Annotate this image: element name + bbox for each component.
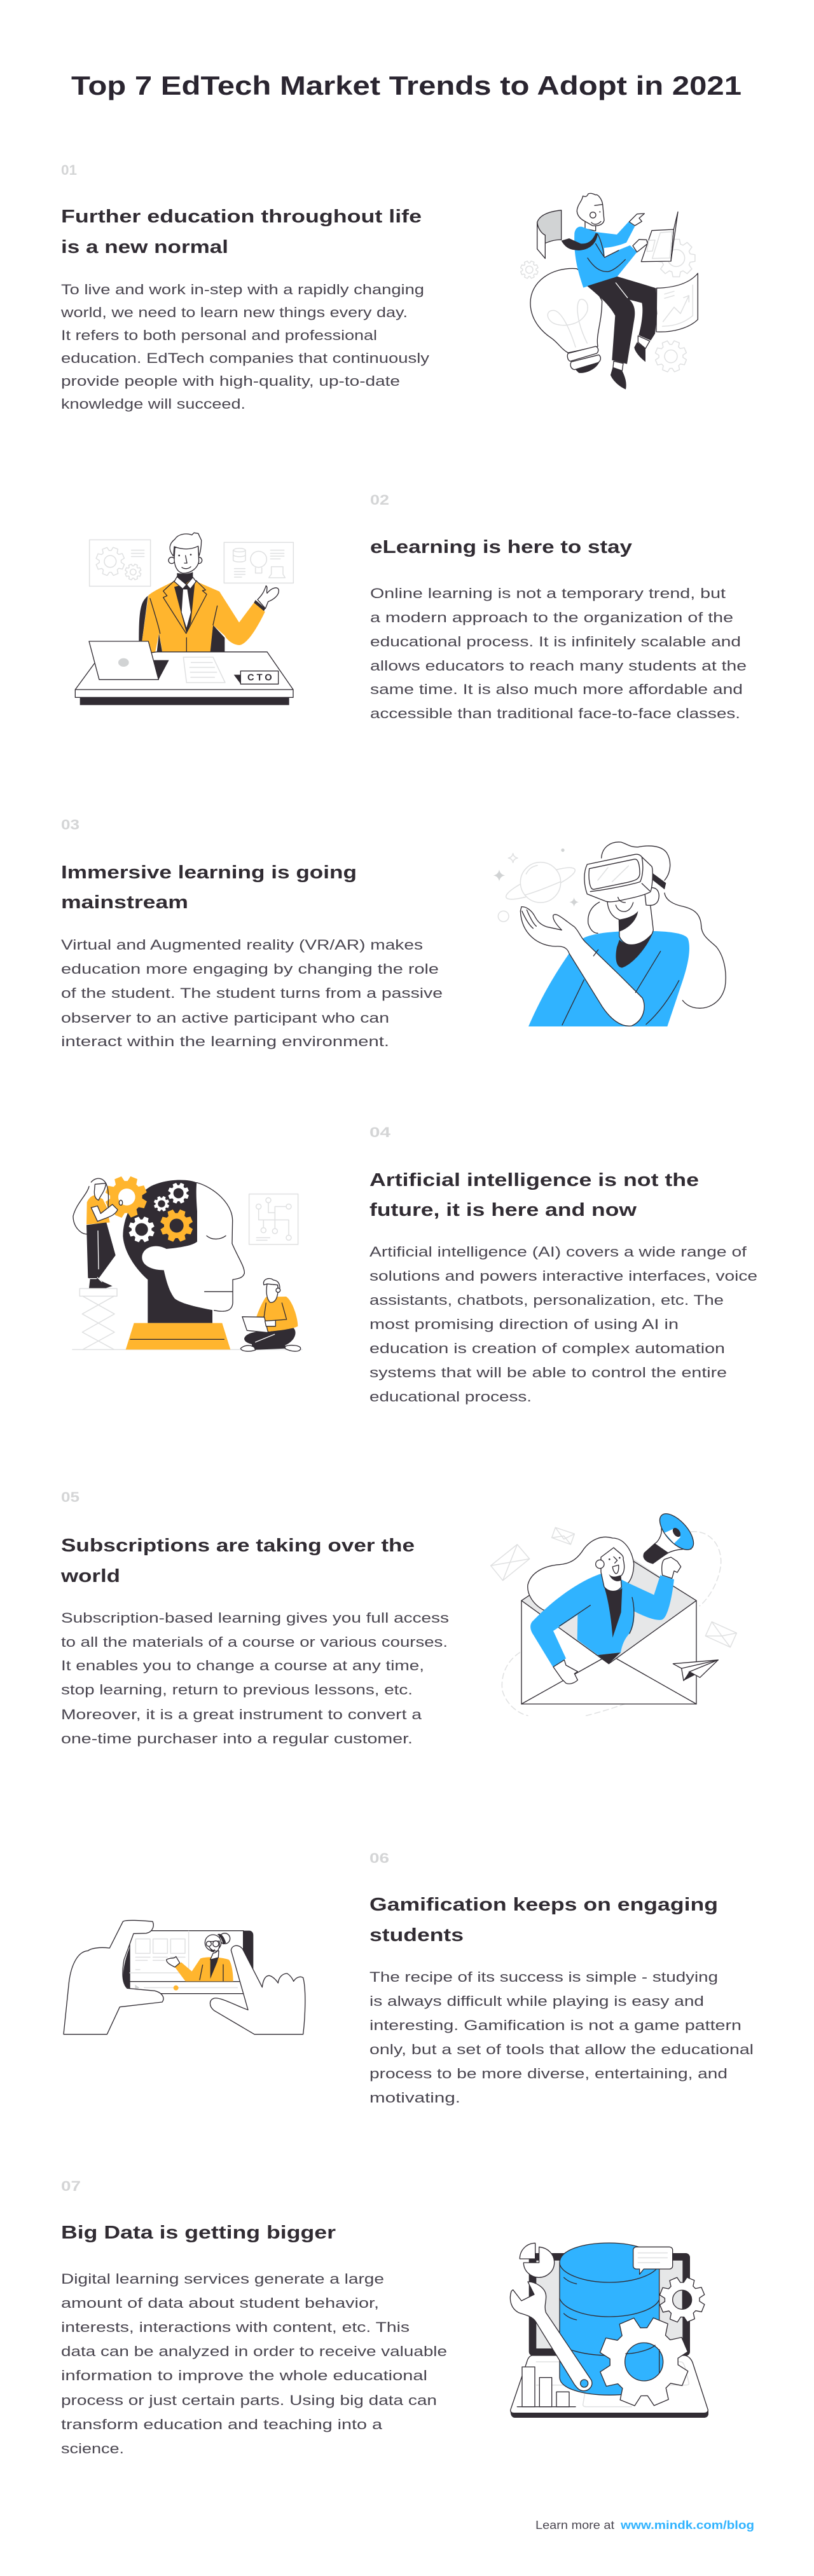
body text 01: knowledge will succeed. bbox=[61, 396, 245, 412]
body text 04: Artificial intelligence (AI) covers a wide range of bbox=[369, 1244, 747, 1260]
illustration: woman in VR headset with planet bbox=[493, 842, 726, 1026]
heading 04: future, it is here and now bbox=[369, 1200, 637, 1220]
heading 04: Artificial intelligence is not the bbox=[369, 1170, 699, 1190]
body text 04: most promising direction of using AI in bbox=[369, 1316, 679, 1332]
heading 03 bbox=[61, 862, 357, 913]
illustration: woman with megaphone in envelope bbox=[491, 1508, 736, 1715]
body text 04: systems that will be able to control the entire bbox=[369, 1365, 727, 1380]
heading 06: Gamification keeps on engaging bbox=[369, 1895, 718, 1915]
heading 03: mainstream bbox=[61, 892, 188, 913]
body text 04: assistants, chatbots, personalization, etc. The bbox=[369, 1292, 724, 1308]
body text 02 bbox=[370, 585, 747, 721]
heading 01 bbox=[61, 207, 422, 257]
heading 07: Big Data is getting bigger bbox=[61, 2223, 336, 2243]
body text 06: interesting. Gamification is not a game pattern bbox=[369, 2017, 742, 2033]
body text 04: education is creation of complex automation bbox=[369, 1340, 725, 1356]
number 02: 02 bbox=[370, 492, 389, 508]
heading 05: Subscriptions are taking over the bbox=[61, 1536, 415, 1556]
body text 01 bbox=[60, 282, 430, 412]
body text 01: education. EdTech companies that continuously bbox=[61, 350, 430, 366]
illustration: hands holding phone with video lesson bbox=[64, 1920, 305, 2034]
body text 07: Digital learning services generate a large bbox=[61, 2271, 384, 2287]
body text 06: is always difficult while playing is easy and bbox=[369, 1993, 704, 2009]
CTO label: CTO bbox=[247, 673, 272, 683]
heading 01: Further education throughout life bbox=[61, 207, 422, 227]
title: Top 7 EdTech Market Trends to Adopt in 2021 bbox=[71, 71, 742, 100]
body text 05: Moreover, it is a great instrument to convert a bbox=[61, 1707, 422, 1722]
body text 07: information to improve the whole educational bbox=[61, 2368, 427, 2383]
number 05: 05 bbox=[61, 1489, 79, 1505]
illustration: AI head with gears bbox=[72, 1170, 302, 1351]
body text 02: same time. It is also much more affordable and bbox=[370, 681, 743, 697]
body text 02: educational process. It is infinitely scalable and bbox=[370, 634, 741, 650]
panel: trend 01 bbox=[60, 162, 698, 412]
body text 04: solutions and powers interactive interfaces, voice bbox=[369, 1268, 757, 1284]
heading 06 bbox=[369, 1895, 718, 1946]
body text 03: education more engaging by changing the role bbox=[61, 961, 439, 977]
heading 01: is a new normal bbox=[61, 237, 228, 257]
body text 01: To live and work in-step with a rapidly changing bbox=[61, 282, 424, 297]
body text 06: process to be more diverse, entertaining, and bbox=[369, 2066, 728, 2082]
body text 05: to all the materials of a course or various courses. bbox=[61, 1634, 448, 1650]
body text 03: interact within the learning environment. bbox=[61, 1033, 389, 1049]
footer: learn more link bbox=[535, 2519, 754, 2532]
illustration: database, wrench and gears on laptop bbox=[510, 2243, 712, 2420]
body text 02: a modern approach to the organization of the bbox=[370, 610, 733, 625]
body text 04: educational process. bbox=[369, 1389, 532, 1405]
body text 03 bbox=[61, 937, 443, 1049]
body text 03: Virtual and Augmented reality (VR/AR) makes bbox=[61, 937, 423, 953]
body text 07: interests, interactions with content, etc. This bbox=[61, 2319, 410, 2335]
body text 01: It refers to both personal and professional bbox=[61, 327, 377, 343]
body text 06: motivating. bbox=[369, 2090, 460, 2106]
body text 05: Subscription-based learning gives you full access bbox=[61, 1610, 449, 1626]
body text 06: only, but a set of tools that allow the educational bbox=[369, 2041, 754, 2057]
panel: trend 07 bbox=[61, 2178, 712, 2457]
body text 04 bbox=[369, 1244, 757, 1405]
heading 05: world bbox=[60, 1566, 120, 1586]
body text 07: data can be analyzed in order to receive valuable bbox=[61, 2343, 447, 2359]
illustration: CTO at desk bbox=[75, 533, 293, 705]
body text 07: science. bbox=[61, 2441, 124, 2457]
body text 01: world, we need to learn new things every day. bbox=[60, 304, 408, 320]
number 04: 04 bbox=[369, 1124, 391, 1140]
footer: learn more link: Learn more at bbox=[535, 2519, 614, 2532]
body text 02: Online learning is not a temporary trend, but bbox=[370, 585, 726, 601]
number 01: 01 bbox=[61, 162, 77, 178]
body text 03: observer to an active participant who can bbox=[61, 1010, 389, 1026]
body text 02: accessible than traditional face-to-face classes. bbox=[370, 705, 740, 721]
body text 07 bbox=[61, 2271, 447, 2457]
body text 07: process or just certain parts. Using big data can bbox=[61, 2392, 437, 2408]
body text 03: of the student. The student turns from a passive bbox=[61, 985, 443, 1001]
body text 01: provide people with high-quality, up-to-date bbox=[61, 373, 400, 389]
heading 04 bbox=[369, 1170, 699, 1220]
number 07: 07 bbox=[61, 2178, 81, 2194]
heading 06: students bbox=[369, 1925, 464, 1946]
footer: learn more link: www.mindk.com/blog bbox=[620, 2519, 754, 2532]
illustration: man on lightbulb with laptop bbox=[518, 193, 698, 390]
panel: trend 06 bbox=[64, 1850, 754, 2106]
panel: trend 05 bbox=[60, 1489, 736, 1747]
body text 05: It enables you to change a course at any time, bbox=[61, 1658, 424, 1673]
panel: trend 02 bbox=[75, 492, 747, 721]
body text 07: transform education and teaching into a bbox=[61, 2416, 383, 2432]
body text 02: allows educators to reach many students at the bbox=[370, 658, 747, 674]
body text 05 bbox=[61, 1610, 449, 1747]
panel: trend 03 bbox=[61, 817, 726, 1049]
body text 05: one-time purchaser into a regular customer. bbox=[61, 1731, 413, 1747]
number 06: 06 bbox=[369, 1850, 389, 1866]
heading 02: eLearning is here to stay bbox=[370, 537, 632, 557]
body text 06: The recipe of its success is simple - studying bbox=[369, 1969, 718, 1985]
body text 07: amount of data about student behavior, bbox=[61, 2295, 379, 2311]
body text 05: stop learning, return to previous lessons, etc. bbox=[61, 1682, 413, 1698]
heading 03: Immersive learning is going bbox=[61, 862, 357, 883]
panel: trend 04 bbox=[72, 1124, 757, 1405]
heading 05 bbox=[60, 1536, 415, 1586]
body text 06 bbox=[369, 1969, 754, 2106]
number 03: 03 bbox=[61, 817, 79, 833]
